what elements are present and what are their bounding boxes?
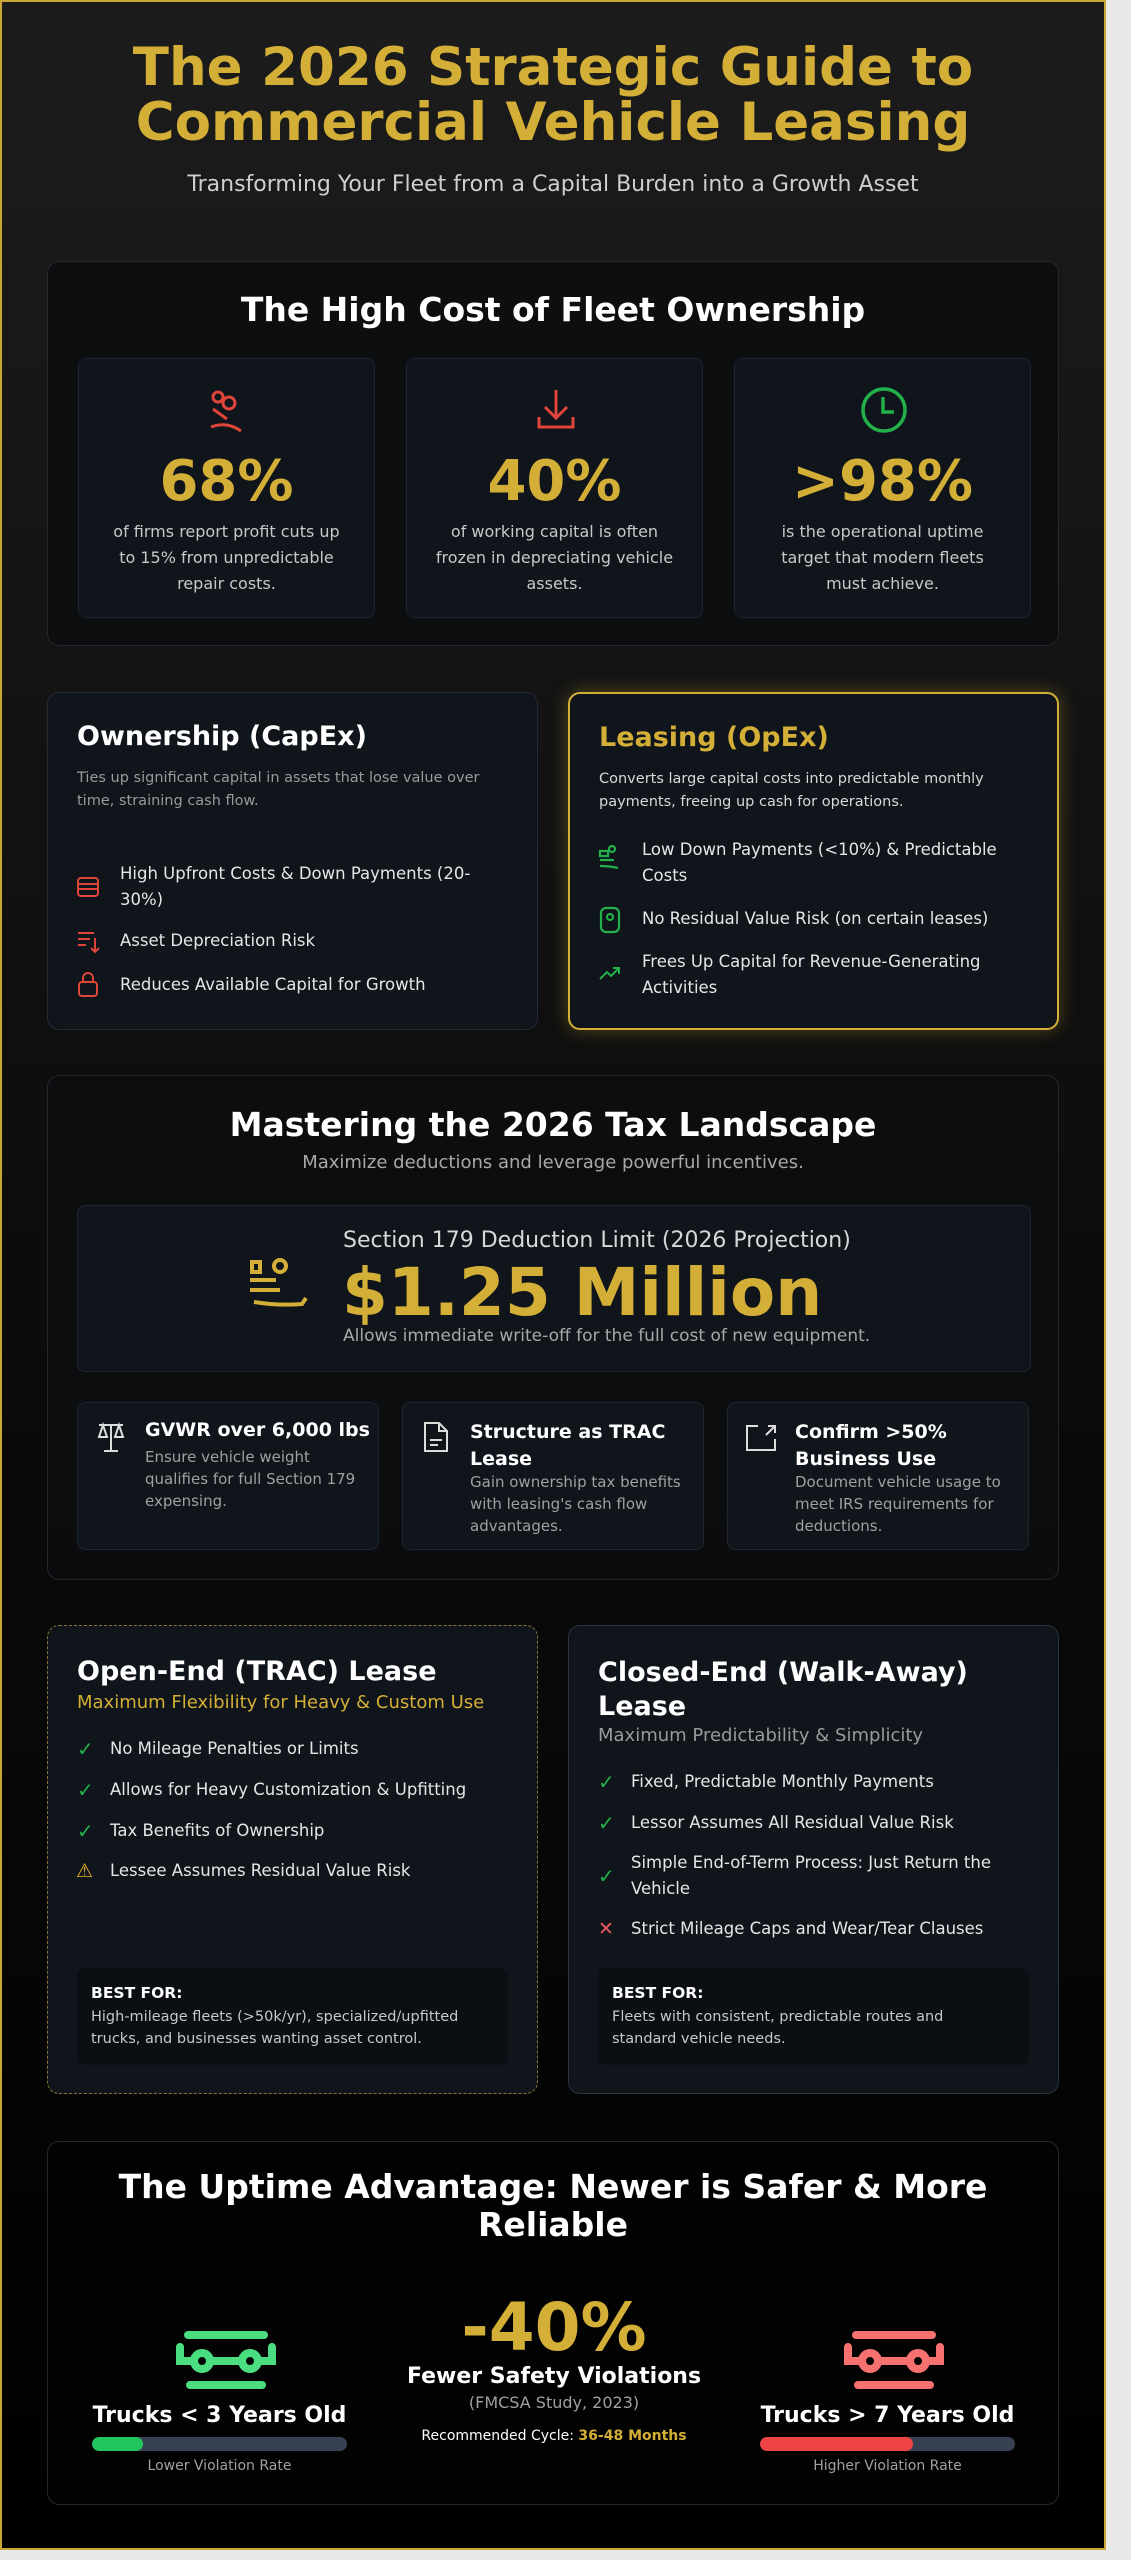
- heading: The High Cost of Fleet Ownership: [241, 290, 865, 329]
- icon: money hand: [250, 1258, 308, 1307]
- item 1: High Upfront Costs & Down Payments (20-30%): [120, 864, 470, 909]
- description: Converts large capital costs into predictable monthly payments, freeing up cash for operations.: [599, 771, 984, 810]
- section 179 box: [77, 1205, 1031, 1372]
- panel: open-end TRAC lease: ✓: [77, 1737, 94, 1761]
- heading: Closed-End (Walk-Away) Lease: [598, 1657, 968, 1722]
- item 2: No Residual Value Risk (on certain leases): [642, 909, 988, 928]
- item 2: Allows for Heavy Customization & Upfitting: [110, 1780, 466, 1799]
- desc: Gain ownership tax benefits with leasing's cash flow advantages.: [470, 1473, 681, 1535]
- item 1: Low Down Payments (<10%) & Predictable Costs: [642, 840, 997, 885]
- stat text: is the operational uptime target that modern fleets must achieve.: [781, 522, 984, 593]
- stat: 40%: 40%: [487, 449, 622, 514]
- panel: closed-end lease: ✕: [598, 1918, 614, 1940]
- label: Trucks > 7 Years Old: [761, 2403, 1014, 2428]
- item 1: Fixed, Predictable Monthly Payments: [631, 1772, 934, 1791]
- center stat: Fewer Safety Violations: [407, 2364, 701, 2389]
- panel: open-end TRAC lease: ✓: [77, 1819, 94, 1843]
- item 3: [77, 1819, 324, 1843]
- stat card 1: [78, 358, 375, 618]
- heading: The Uptime Advantage: Newer is Safer & More Reliable: [119, 2167, 987, 2244]
- heading: Ownership (CapEx): [77, 721, 367, 752]
- heading: Mastering the 2026 Tax Landscape: [230, 1105, 876, 1144]
- icon: document: [424, 1422, 448, 1452]
- caption: Allows immediate write-off for the full cost of new equipment.: [343, 1326, 870, 1346]
- panel: open-end TRAC lease: ✓: [77, 1778, 94, 1802]
- stat: 68%: 68%: [159, 449, 294, 514]
- stat text: of firms report profit cuts up to 15% from unpredictable repair costs.: [113, 522, 340, 593]
- item 3: Tax Benefits of Ownership: [110, 1821, 324, 1840]
- subtitle: Maximum Flexibility for Heavy & Custom Use: [77, 1692, 484, 1713]
- icon: scale: [98, 1422, 124, 1452]
- center stat: [407, 2289, 701, 2444]
- caption: Lower Violation Rate: [148, 2458, 291, 2474]
- stat card 2: [406, 358, 703, 618]
- best for box: [598, 1968, 1029, 2065]
- icon: clock: [861, 387, 907, 433]
- stat text: of working capital is often frozen in depreciating vehicle assets.: [436, 522, 673, 593]
- desc: Document vehicle usage to meet IRS requirements for deductions.: [795, 1473, 1001, 1535]
- title: The 2026 Strategic Guide to: [133, 37, 973, 98]
- subtitle: Transforming Your Fleet from a Capital Burden into a Growth Asset: [187, 172, 919, 197]
- panel: closed-end lease: ✓: [598, 1811, 615, 1835]
- new trucks group: [92, 2331, 347, 2474]
- heading: Leasing (OpEx): [599, 722, 829, 753]
- panel: closed-end lease: [568, 1625, 1059, 2094]
- panel: uptime advantage: [47, 2141, 1059, 2505]
- item 2: Asset Depreciation Risk: [120, 931, 315, 950]
- caption: Higher Violation Rate: [813, 2458, 962, 2474]
- tip card 2: [402, 1402, 704, 1550]
- panel: high cost of ownership: [47, 261, 1059, 646]
- title: Confirm >50% Business Use: [795, 1421, 947, 1470]
- stat card 3: [734, 358, 1031, 618]
- description: Ties up significant capital in assets that lose value over time, straining cash flow.: [77, 770, 480, 809]
- panel: tax landscape: [47, 1075, 1059, 1580]
- best for box: Fleets with consistent, predictable routes and standard vehicle needs.: [612, 2009, 943, 2047]
- best for box: BEST FOR:: [612, 1984, 703, 2002]
- item 1: No Mileage Penalties or Limits: [110, 1739, 359, 1758]
- item 3: Simple End-of-Term Process: Just Return the Vehicle: [631, 1853, 991, 1898]
- panel: closed-end lease: ✓: [598, 1864, 615, 1888]
- tip card 3: [727, 1402, 1029, 1550]
- title: Commercial Vehicle Leasing: [136, 92, 970, 153]
- item 3: [78, 972, 426, 997]
- panel: open-end TRAC lease: ⚠: [76, 1860, 93, 1882]
- icon: repair: [210, 390, 242, 432]
- best for box: BEST FOR:: [91, 1984, 182, 2002]
- best for box: High-mileage fleets (>50k/yr), specialized/upfitted trucks, and businesses wanting asset control.: [91, 2009, 458, 2047]
- best for box: [77, 1968, 508, 2065]
- heading: Open-End (TRAC) Lease: [77, 1656, 437, 1687]
- item 1: [77, 1737, 359, 1761]
- item 3: Reduces Available Capital for Growth: [120, 975, 426, 994]
- title: GVWR over 6,000 lbs: [145, 1419, 370, 1441]
- icon: green truck: [176, 2331, 276, 2389]
- subtitle: Maximum Predictability & Simplicity: [598, 1725, 923, 1746]
- title: [133, 37, 973, 153]
- old trucks group: [760, 2331, 1015, 2474]
- center stat: -40%: [461, 2289, 647, 2366]
- item 4: Strict Mileage Caps and Wear/Tear Clauses: [631, 1919, 983, 1938]
- item 4: Lessee Assumes Residual Value Risk: [110, 1861, 410, 1880]
- icon: share: [746, 1425, 776, 1451]
- panel: open-end TRAC lease: [47, 1625, 538, 2094]
- item 3: Frees Up Capital for Revenue-Generating Activities: [642, 952, 981, 997]
- item 2: [600, 906, 988, 934]
- label: Section 179 Deduction Limit (2026 Projection): [343, 1228, 851, 1253]
- item 2: [78, 931, 315, 954]
- subtitle: Maximize deductions and leverage powerful incentives.: [302, 1152, 804, 1173]
- panel: ownership capex: [47, 692, 538, 1030]
- big number: $1.25 Million: [342, 1254, 822, 1331]
- bar: [760, 2437, 1015, 2451]
- center stat: (FMCSA Study, 2023): [469, 2393, 639, 2412]
- bar: [92, 2437, 347, 2451]
- desc: Ensure vehicle weight qualifies for full Section 179 expensing.: [145, 1448, 355, 1510]
- tip card 1: [77, 1402, 379, 1550]
- item 2: Lessor Assumes All Residual Value Risk: [631, 1813, 954, 1832]
- panel: leasing opex: [568, 692, 1059, 1030]
- label: Trucks < 3 Years Old: [93, 2403, 346, 2428]
- center stat: Recommended Cycle: 36-48 Months: [421, 2428, 687, 2444]
- panel: closed-end lease: ✓: [598, 1770, 615, 1794]
- icon: download: [538, 390, 574, 428]
- title: Structure as TRAC Lease: [470, 1421, 665, 1470]
- icon: red truck: [844, 2331, 944, 2389]
- stat: >98%: >98%: [792, 449, 973, 514]
